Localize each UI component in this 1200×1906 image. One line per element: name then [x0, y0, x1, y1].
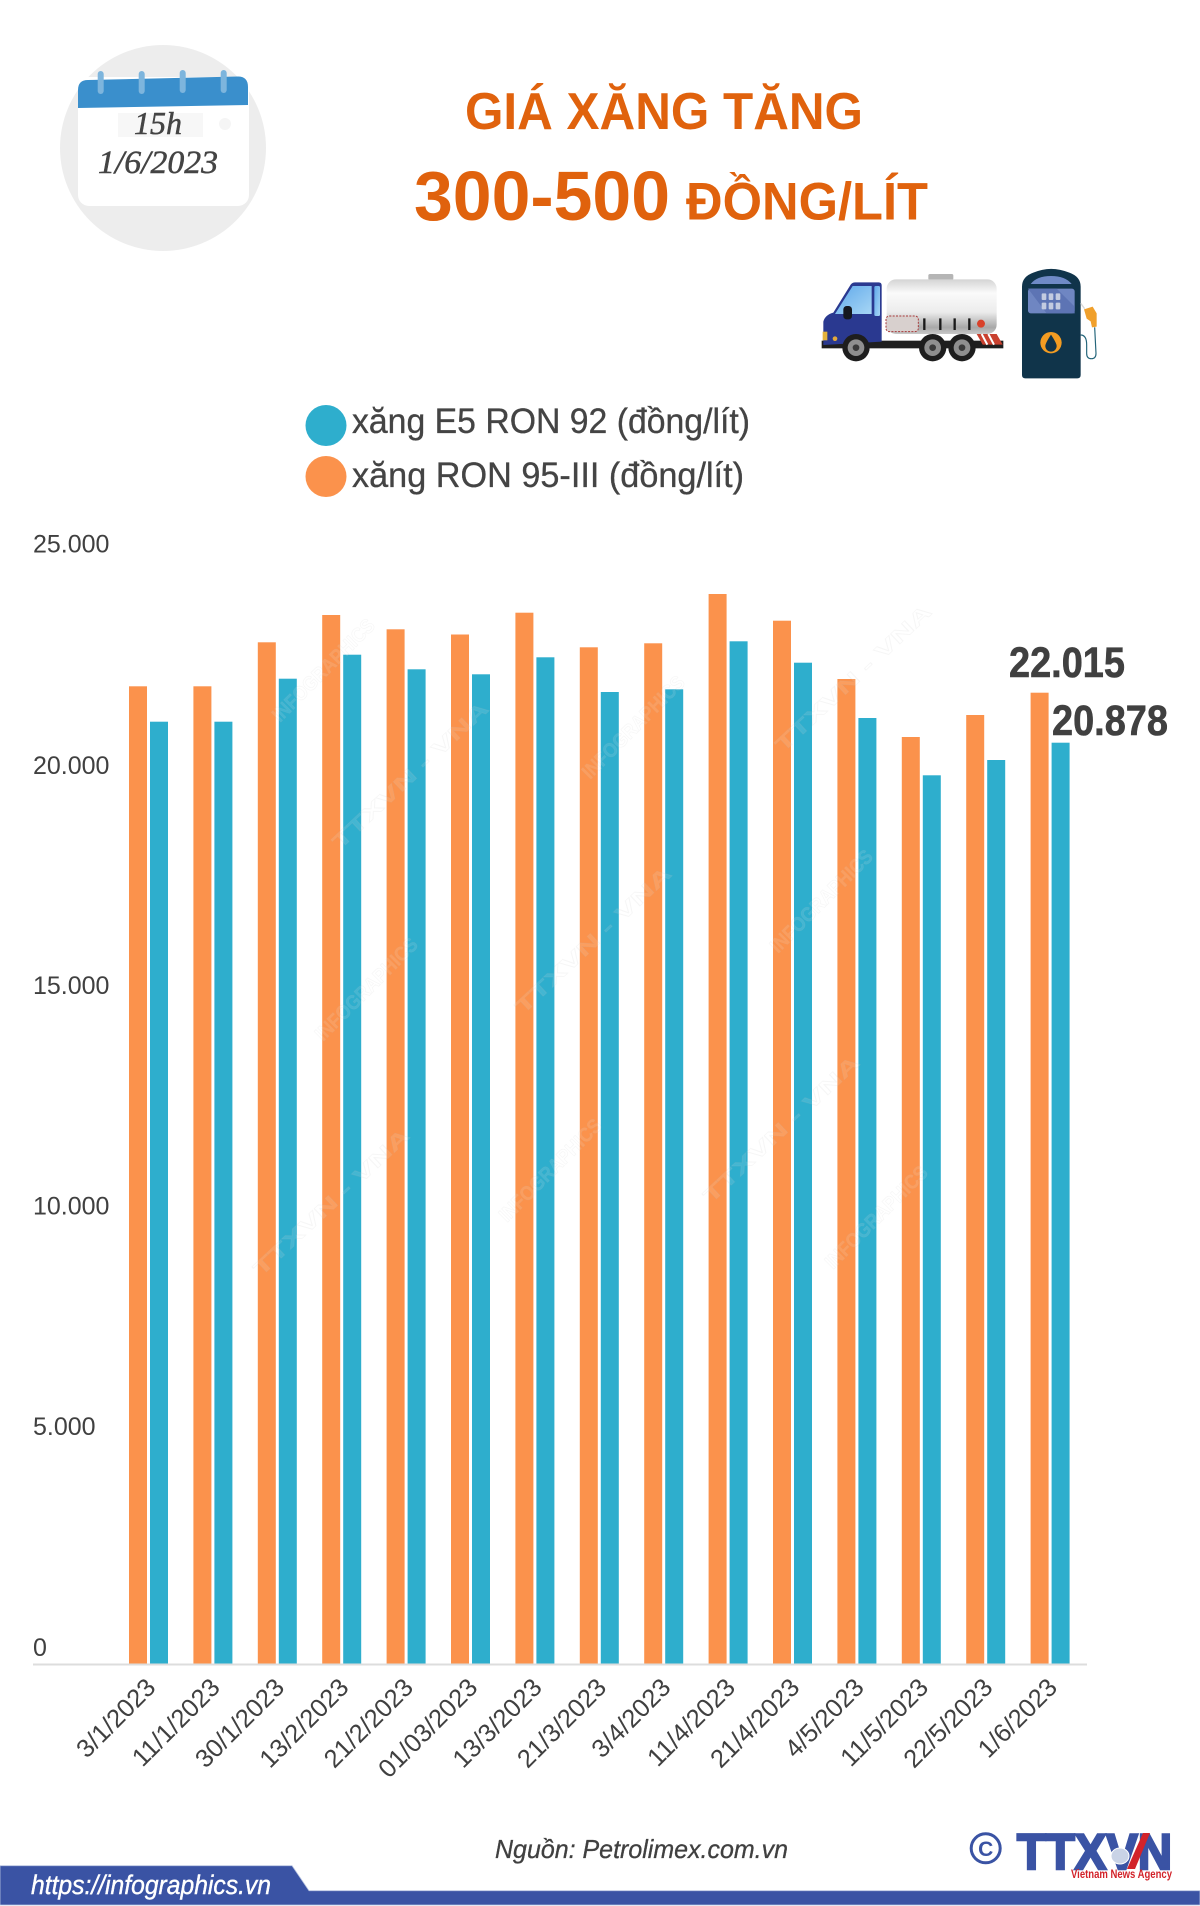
x axis date labels: 11/5/2023 [835, 1673, 934, 1772]
value callouts [1009, 639, 1168, 745]
icon: fuel pump [1022, 269, 1097, 378]
legend [306, 402, 750, 497]
bars 21/2/2023 [387, 629, 426, 1663]
x axis date labels: 21/3/2023 [512, 1673, 612, 1773]
text: TTXVN - VNA [328, 698, 493, 854]
bars 11/5/2023 [902, 737, 941, 1664]
x axis date labels: 22/5/2023 [898, 1673, 998, 1773]
x axis date labels: 11/1/2023 [127, 1673, 226, 1772]
y axis labels: 0 [33, 1634, 47, 1662]
bars 3/1/2023 [129, 686, 168, 1664]
x axis date labels: 4/5/2023 [780, 1673, 870, 1763]
logo: TTXVN Vietnam News Agency: Vietnam News Agency [1071, 1867, 1172, 1881]
icon: fuel tanker truck [822, 274, 1003, 361]
logo: TTXVN Vietnam News Agency: TTXVN [1017, 1824, 1172, 1880]
x axis date labels: 11/4/2023 [642, 1673, 741, 1772]
bars 30/1/2023 [258, 642, 297, 1664]
y axis labels: 10.000 [33, 1192, 109, 1220]
legend item: RON 95-III: xăng RON 95-III (đồng/lít) [352, 456, 744, 495]
x axis date labels [71, 1673, 1063, 1783]
bars 21/3/2023 [580, 647, 619, 1664]
text: TTXVN - VNA [699, 1052, 864, 1208]
title line 2 unit: ĐỒNG/LÍT [686, 172, 928, 232]
x axis date labels: 30/1/2023 [190, 1673, 290, 1773]
y axis labels: 20.000 [33, 752, 109, 780]
text: TTXVN - VNA [249, 1125, 414, 1281]
x axis date labels: 13/2/2023 [254, 1673, 354, 1773]
x axis date labels: 3/4/2023 [586, 1673, 676, 1763]
logo: TTXVN Vietnam News Agency: C [978, 1838, 993, 1861]
value: E5 RON 92 20.878: 20.878 [1052, 697, 1168, 745]
bars 3/4/2023 [644, 643, 683, 1664]
x axis date labels: 3/1/2023 [71, 1673, 161, 1763]
bars 21/4/2023 [773, 621, 812, 1664]
title line 1: GIÁ XĂNG TĂNG [465, 83, 863, 141]
text: INFOGRAPHICS [268, 615, 380, 727]
calendar time: 15h [134, 105, 182, 141]
bars 13/3/2023 [515, 613, 554, 1664]
x axis date labels: 1/6/2023 [973, 1673, 1063, 1763]
value: RON 95-III 22.015: 22.015 [1009, 639, 1125, 687]
y axis labels: 25.000 [33, 530, 109, 558]
y axis labels: 15.000 [33, 972, 109, 1000]
text: INFOGRAPHICS [578, 672, 690, 784]
x axis date labels: 01/03/2023 [373, 1673, 483, 1783]
title [414, 83, 928, 235]
footer url: https://infographics.vn [31, 1870, 271, 1900]
y axis labels: 5.000 [33, 1413, 96, 1441]
footer band with url [0, 1866, 1200, 1905]
text: INFOGRAPHICS [495, 1115, 607, 1227]
legend item: E5 RON 92: xăng E5 RON 92 (đồng/lít) [352, 402, 750, 441]
bar chart [129, 594, 1070, 1664]
bars 1/6/2023 [1031, 693, 1070, 1664]
icon: calendar badge with date [60, 45, 266, 251]
text: TTXVN - VNA [511, 863, 676, 1019]
x axis date labels: 13/3/2023 [448, 1673, 548, 1773]
bars 01/03/2023 [451, 634, 490, 1664]
x axis date labels: 21/2/2023 [319, 1673, 419, 1773]
text: INFOGRAPHICS [311, 934, 423, 1046]
bars 11/1/2023 [193, 686, 232, 1664]
calendar date: 1/6/2023 [98, 145, 218, 181]
title line 2 number: 300-500 [414, 157, 670, 235]
text: TTXVN - VNA [771, 601, 936, 757]
bars 11/4/2023 [709, 594, 748, 1664]
text: INFOGRAPHICS [821, 1162, 933, 1274]
source note: Nguồn: Petrolimex.com.vn [495, 1834, 788, 1864]
x axis date labels: 21/4/2023 [705, 1673, 805, 1773]
bars 13/2/2023 [322, 615, 361, 1664]
y axis labels [33, 530, 109, 1662]
bars 4/5/2023 [837, 679, 876, 1664]
text: INFOGRAPHICS [766, 846, 878, 958]
bars 22/5/2023 [966, 715, 1005, 1664]
